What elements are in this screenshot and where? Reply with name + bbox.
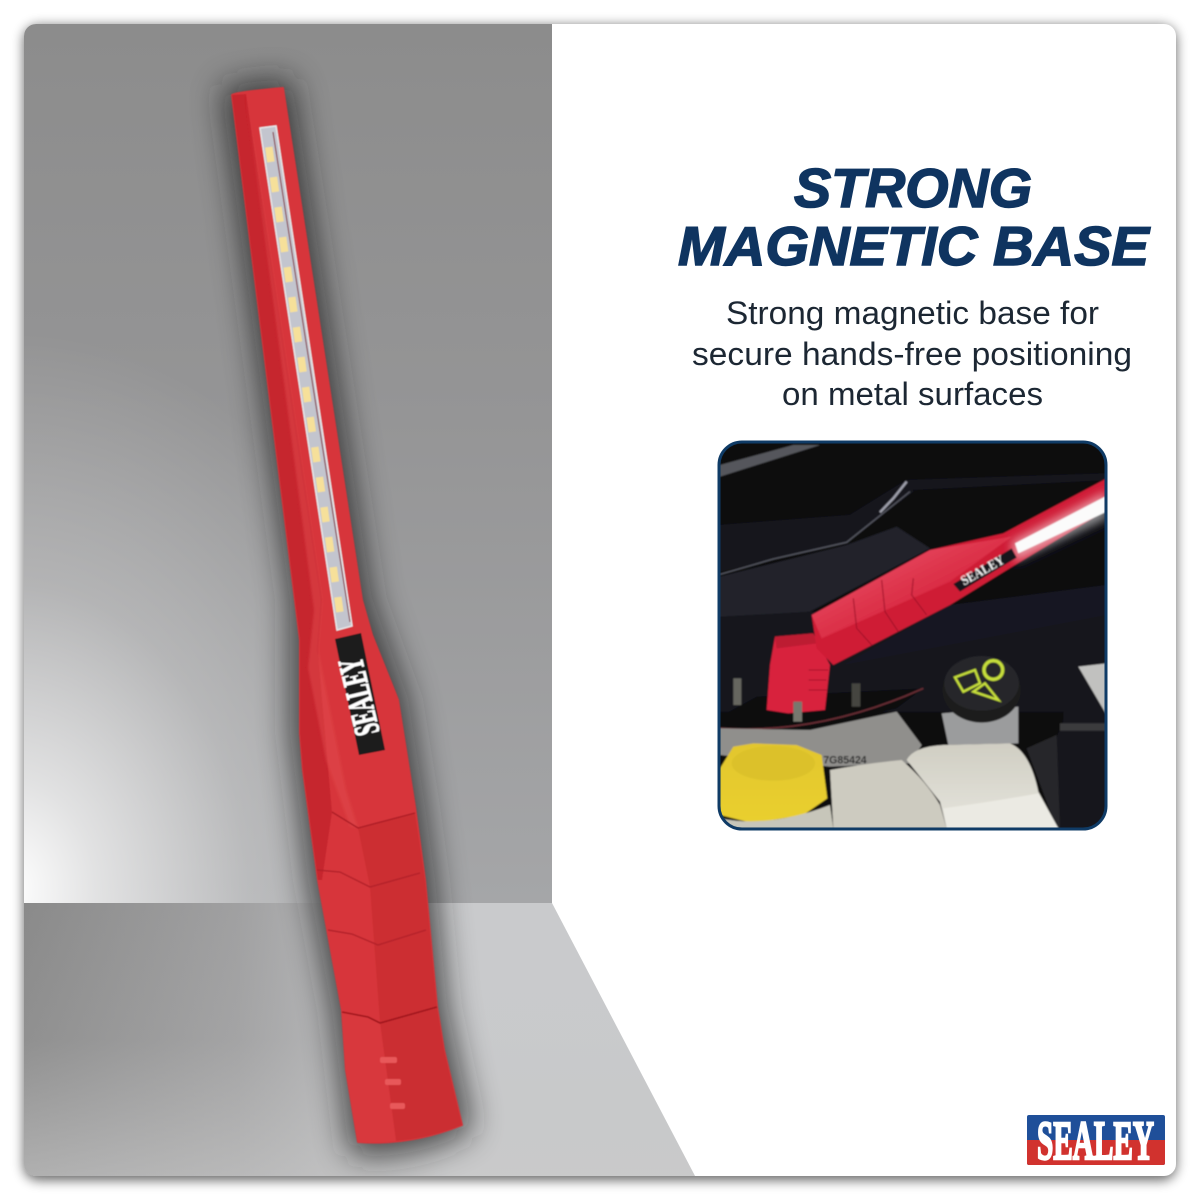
torch SEALEY badge: SEALEY [330, 654, 387, 739]
engine bay background [720, 444, 1104, 828]
torch body [232, 88, 462, 1143]
right black component [1057, 712, 1104, 828]
torch left face [232, 94, 332, 880]
photo: light attached under a car bonnet: 7G85424 [823, 754, 867, 766]
white coolant reservoir [830, 760, 947, 828]
brake fluid neck [942, 707, 1018, 745]
logo: SEALEY [1027, 1115, 1165, 1165]
panel: product backdrop [24, 24, 695, 1176]
torch LED beam [1012, 492, 1107, 562]
description text: on metal surfaces [782, 376, 1043, 412]
black bonnet strut [720, 480, 913, 572]
product: red LED inspection light [232, 88, 462, 1143]
heading: MAGNETIC BASE [678, 215, 1151, 277]
description text: Strong magnetic base for [726, 295, 1099, 331]
LED window [260, 126, 352, 630]
product shadow halo [232, 88, 462, 1147]
backdrop floor [24, 903, 695, 1176]
photo: light attached under a car bonnet [710, 435, 1120, 845]
LED chips [265, 147, 344, 612]
lower bay band [710, 612, 1120, 712]
strut tower dish [720, 688, 923, 728]
description text: secure hands-free positioning [692, 336, 1132, 372]
torch lower segments [317, 812, 462, 1142]
cap warning icons [955, 661, 1003, 700]
photo border [719, 442, 1106, 829]
description text [693, 300, 1130, 406]
brake fluid cap [952, 706, 1016, 724]
red torch in photo [812, 478, 1107, 665]
torch SEALEY badge [330, 633, 387, 755]
reservoir tops [720, 712, 922, 767]
heading: STRONG [794, 157, 1032, 219]
torch highlight ridge [261, 200, 356, 826]
heading [678, 168, 1152, 266]
photo: light attached under a car bonnet: SEALEY [959, 553, 1007, 589]
backdrop wall [24, 24, 552, 904]
torch grip bumps [380, 1057, 405, 1109]
torch label [953, 548, 1017, 592]
yellow reservoir cap [720, 743, 827, 823]
red magnetic base [767, 633, 830, 713]
